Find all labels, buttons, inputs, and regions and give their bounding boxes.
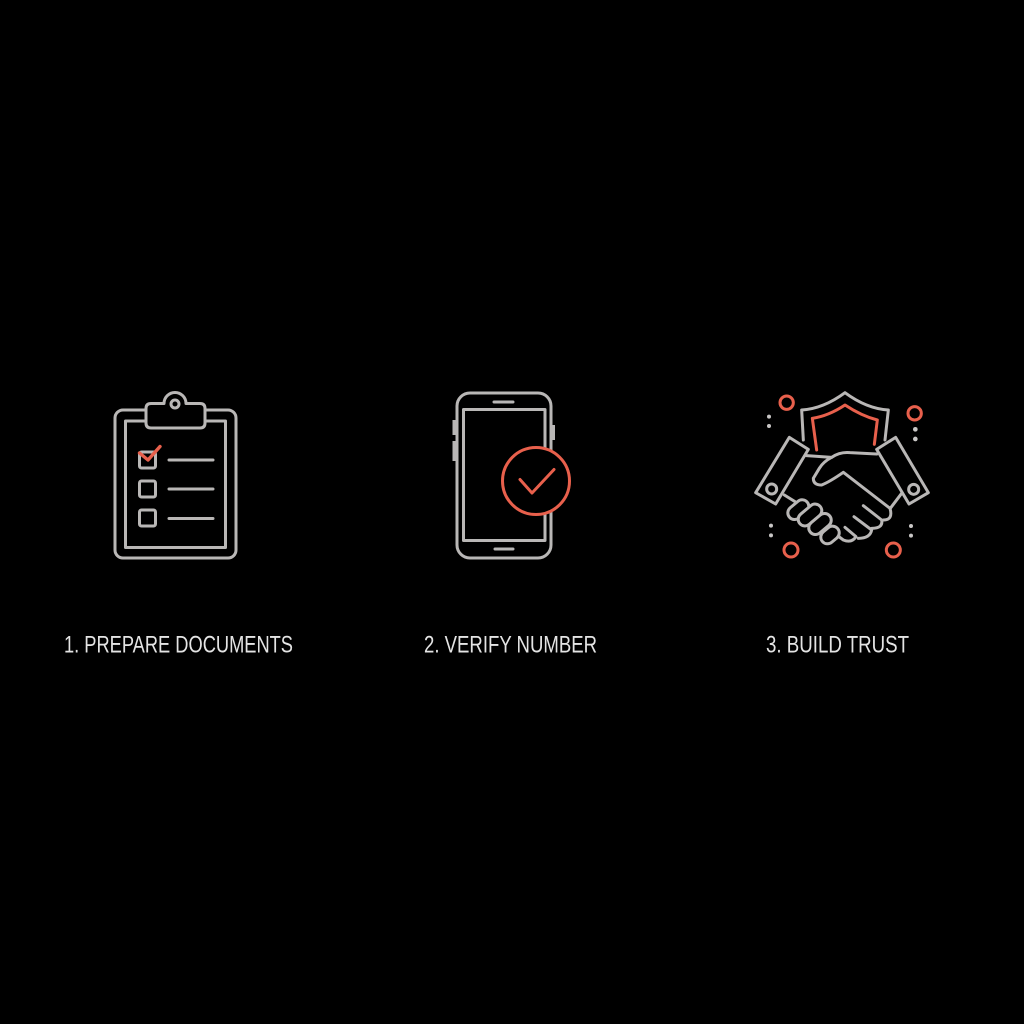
icon part: decorative circles and dots — [767, 396, 921, 557]
icon: clipboard checklist — [115, 393, 236, 558]
label: step 2: 2. VERIFY NUMBER — [424, 632, 597, 658]
label: step 1: 1. PREPARE DOCUMENTS — [64, 632, 293, 658]
icon part: shield — [802, 393, 888, 450]
panel: step 3 build trust — [756, 393, 928, 658]
icon: handshake with shield — [756, 393, 928, 557]
panel: step 1 prepare documents — [64, 393, 293, 658]
icon part: hands — [756, 437, 928, 547]
label: step 3: 3. BUILD TRUST — [766, 632, 909, 658]
icon: smartphone with check badge — [454, 393, 570, 558]
panel: step 2 verify number — [424, 393, 597, 658]
